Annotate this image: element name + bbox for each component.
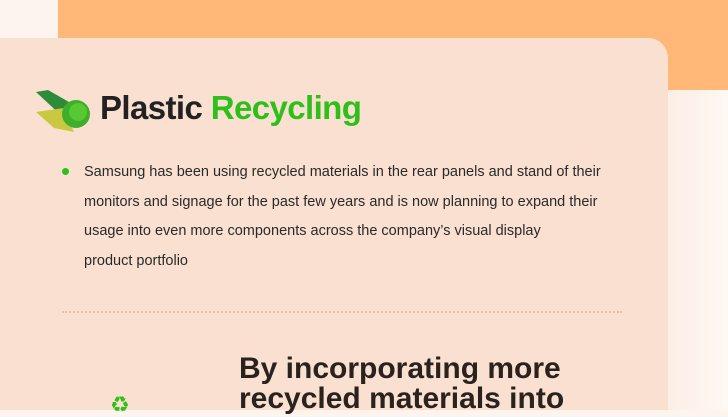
- icon: leaf logo: [36, 90, 90, 132]
- icon: recycle: ♻: [110, 392, 130, 417]
- heading: statement: [239, 352, 564, 415]
- text block: bullet: [62, 164, 601, 268]
- orange top block: [58, 0, 728, 90]
- heading: statement: By incorporating more: [239, 352, 561, 385]
- title: Plastic Recycling: [100, 89, 361, 126]
- heading: statement: recycled materials into: [239, 382, 564, 415]
- right light background: [668, 90, 728, 410]
- text block: bullet: product portfolio: [84, 252, 188, 268]
- text block: bullet: Samsung has been using recycled materials in the rear panels and stand of their monitors and signage for the past few years and is now planning to expand their usage into even more components across the company’s visual display: [84, 164, 601, 239]
